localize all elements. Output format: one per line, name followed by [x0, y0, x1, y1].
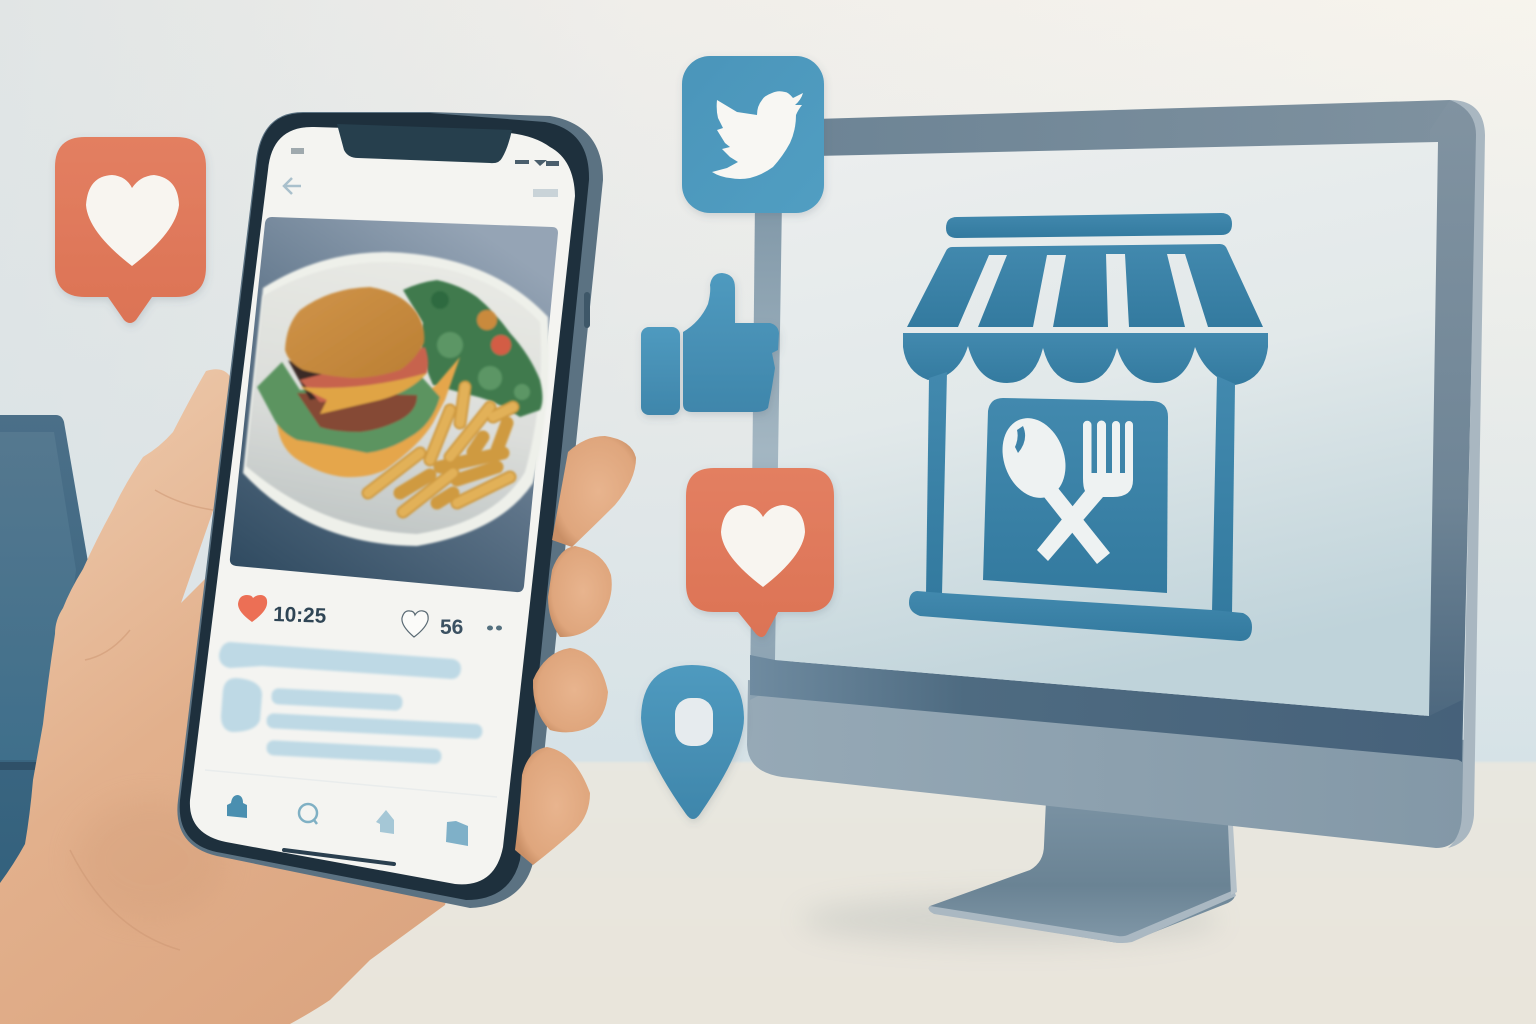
middle finger: [548, 546, 612, 637]
tab bar icons: [227, 795, 468, 846]
plate well: [246, 262, 541, 534]
store left wall: [926, 372, 947, 595]
store right wall: [1212, 376, 1235, 615]
top bun: [285, 287, 424, 378]
side button: [584, 292, 590, 328]
menu icon: [533, 189, 558, 197]
cheese: [300, 373, 427, 414]
background laptop: [0, 415, 88, 890]
monitor: [747, 100, 1485, 943]
little finger: [515, 747, 590, 865]
food photo: [230, 217, 558, 592]
fries: [368, 387, 513, 512]
floating icon: twitter bird: [682, 56, 824, 213]
tab bar divider: [205, 770, 497, 797]
gap between thumb and palm: [181, 508, 214, 603]
phone notch: [337, 124, 512, 163]
smartphone: [177, 112, 603, 908]
monitor chin: [747, 680, 1465, 848]
monitor top bezel: [815, 100, 1450, 170]
monitor screen: [775, 142, 1438, 716]
outline heart: [402, 611, 428, 637]
monitor lower dark strip: [750, 655, 1462, 760]
floating icon: heart bubble right: [686, 468, 834, 637]
like heart: [238, 595, 267, 622]
burger: [257, 287, 460, 477]
phone bezel: [180, 113, 589, 900]
phone screen: [190, 127, 575, 884]
store base: [909, 591, 1252, 641]
index finger: [552, 436, 636, 547]
ham: [300, 347, 428, 402]
plate: [243, 252, 549, 546]
like count: 56: [440, 616, 463, 639]
back arrow: [284, 178, 301, 194]
store valance: [903, 333, 1268, 385]
monitor right rim: [1448, 100, 1485, 848]
patty: [297, 393, 417, 432]
blurred text lines: [219, 642, 483, 764]
palm creases: [70, 490, 213, 950]
store roof bar: [946, 213, 1232, 238]
time label: 10:25: [273, 603, 327, 628]
spoon and fork: [992, 409, 1133, 564]
salad: [403, 280, 542, 417]
monitor right bezel: [1425, 100, 1477, 762]
ring finger: [533, 648, 608, 732]
store icon: [903, 213, 1268, 641]
spoon: [992, 409, 1110, 564]
lettuce: [257, 362, 440, 453]
floating icon: location pin: [641, 665, 744, 819]
store window panel: [983, 398, 1168, 593]
hand fingers: [515, 436, 636, 865]
store awning: [907, 244, 1263, 327]
dark layer: [288, 360, 400, 400]
bottom bun: [277, 357, 460, 477]
more dots: [487, 626, 502, 630]
hand palm: [0, 369, 500, 1024]
palm shading: [75, 800, 225, 920]
phone side: [177, 112, 603, 908]
floating icon: heart bubble left: [55, 137, 206, 323]
monitor stand: [929, 800, 1237, 943]
home indicator: [284, 850, 394, 864]
fork: [1037, 420, 1133, 561]
floating icon: thumbs up: [641, 273, 779, 415]
status bar icons: [291, 148, 559, 166]
monitor left bezel: [750, 200, 800, 700]
